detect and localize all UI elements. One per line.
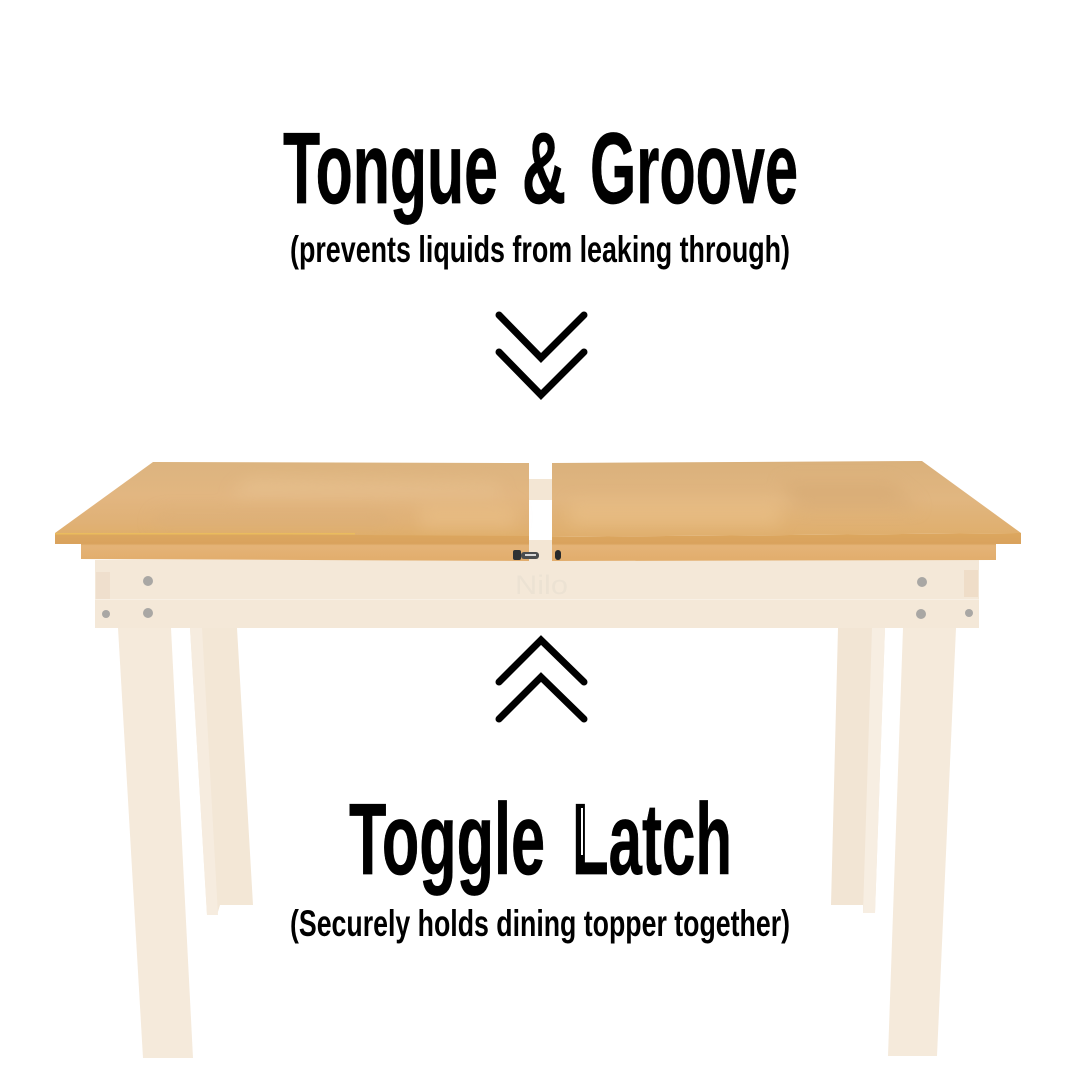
back leg right <box>831 628 885 913</box>
toggle latch left part <box>513 550 539 560</box>
apron with Nilo logo and bolts: Nilo <box>515 570 568 600</box>
back leg left <box>190 628 253 915</box>
title: Tongue & Groove: Tongue <box>283 113 498 225</box>
front leg left <box>118 628 193 1058</box>
centre support between panels <box>529 479 552 561</box>
subtitle: securely holds: (Securely holds dining topper together) <box>290 903 790 944</box>
tabletop left panel <box>55 462 529 561</box>
title: Tongue & Groove <box>283 113 798 225</box>
arrow: double chevron down <box>499 315 584 395</box>
title: Toggle Latch: Toggle <box>349 784 545 896</box>
arrow: double chevron up <box>499 640 584 719</box>
apron with Nilo logo and bolts <box>95 560 979 628</box>
front leg right <box>888 628 956 1056</box>
title: Tongue & Groove: & <box>522 113 566 225</box>
title: Tongue & Groove: Groove <box>590 113 798 225</box>
subtitle: prevents liquids: (prevents liquids from leaking through) <box>290 229 790 270</box>
title: Toggle Latch: Latch <box>572 784 732 896</box>
table illustration <box>55 461 1021 1058</box>
tabletop right panel <box>552 461 1021 561</box>
toggle latch right part <box>555 550 561 560</box>
